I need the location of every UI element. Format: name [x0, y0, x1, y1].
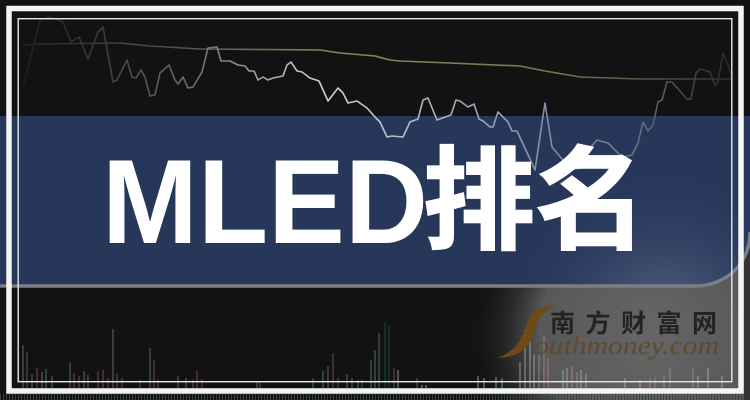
logo swoosh: [497, 305, 557, 358]
bottom edge bars strip: [0, 394, 750, 400]
price line: [23, 17, 732, 170]
title: [102, 135, 647, 269]
blue banner: [0, 116, 750, 286]
moving average line: [23, 43, 732, 79]
bottom right glow: [440, 200, 750, 400]
title: 排名: [423, 139, 647, 264]
banner lower edge: [0, 232, 750, 286]
logo domain: outhmoney.com: [534, 331, 719, 360]
logo: southmoney: [497, 305, 719, 360]
right edge glow strip: [744, 240, 750, 400]
volume bars: [23, 322, 722, 388]
logo chinese name: 南方财富网: [550, 309, 717, 338]
title: MLED: [102, 135, 428, 269]
